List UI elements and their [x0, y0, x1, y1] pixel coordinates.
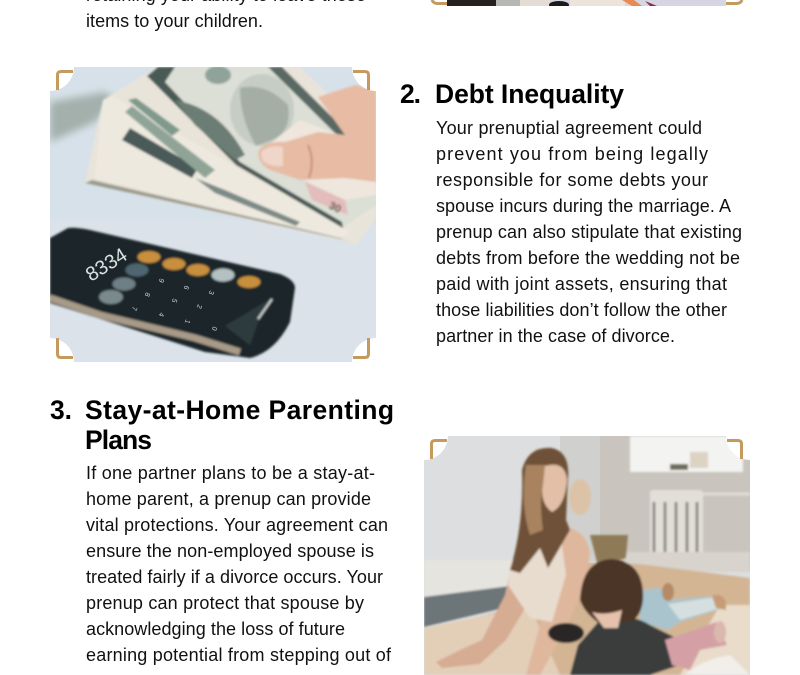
text block: section 2 body: Your prenuptial agreement could [436, 118, 702, 138]
section 2 heading: Debt Inequality [435, 79, 624, 109]
text block: section 2 body: prevent you from being legally [436, 144, 708, 164]
text block: section 3 body: acknowledging the loss of future [86, 619, 345, 639]
text block: section 2 body: prenup can also stipulate that existing [436, 222, 742, 242]
text block: section 3 body [86, 463, 392, 665]
calculator digits: 6 [182, 284, 190, 290]
calculator digits: 8334 [82, 244, 131, 286]
basket and plant [590, 535, 628, 566]
text block: section 3 body: home parent, a prenup can provide [86, 489, 371, 509]
text block: section 2 body: paid with joint assets, ensuring that [436, 274, 727, 294]
woman torso [507, 544, 567, 623]
text block: section 3 body: earning potential from stepping out of [86, 645, 392, 665]
text block: section 3 body: vital protections. Your agreement can [86, 515, 388, 535]
woman arms [436, 580, 524, 668]
calculator digits: 0 [210, 325, 218, 331]
photo: cash and calculator phone [50, 67, 376, 362]
baseboard and floor [424, 560, 514, 597]
calculator digits: 7 [130, 305, 138, 311]
fanned banknotes [85, 67, 376, 245]
text block: end of section 1: items to your children. [86, 11, 263, 31]
section 3 heading [50, 395, 394, 455]
text block: section 3 body: treated fairly if a divorce occurs. Your [86, 567, 383, 587]
calculator digits: 1 [183, 318, 191, 324]
section 3 heading: Stay-at-Home Parenting [85, 395, 394, 425]
photo: top image fragment [430, 0, 744, 6]
text block: section 3 body: prenup can protect that spouse by [86, 593, 364, 613]
radiator [650, 490, 704, 552]
hand and thumb [258, 85, 376, 182]
text block: section 2 body: debts from before the wedding not be [436, 248, 740, 268]
yoga mat [424, 585, 508, 628]
calculator digits: 5 [170, 297, 178, 303]
window [630, 436, 743, 472]
section 3 heading: Plans [85, 425, 152, 455]
top banknote [147, 67, 376, 228]
calculator keys [138, 251, 160, 263]
text block: section 2 body: those liabilities don’t follow the other [436, 300, 727, 320]
calculator digits: 9 [157, 277, 165, 283]
section 3 heading: 3. [50, 395, 72, 425]
phone body [50, 228, 295, 358]
text block: section 2 body: partner in the case of divorce. [436, 326, 675, 346]
calculator digits [82, 244, 218, 331]
child head [580, 559, 643, 628]
woman legs [640, 588, 726, 630]
calculator digits: 8 [143, 291, 151, 297]
calculator digits: 3 [207, 289, 215, 295]
background blurred bill [50, 92, 115, 142]
text block: section 2 body [436, 118, 742, 346]
child body [570, 617, 680, 675]
text block: section 2 body: spouse incurs during the marriage. A [436, 196, 731, 216]
photo: mother and child on floor [424, 436, 750, 675]
section 2 heading: 2. [400, 79, 421, 109]
text block: section 3 body: ensure the non-employed spouse is [86, 541, 374, 561]
woman hair and face [510, 448, 570, 573]
text block: end of section 1 [86, 0, 366, 31]
calculator digits: 4 [157, 311, 165, 317]
text block: section 3 body: If one partner plans to be a stay-at- [86, 463, 375, 483]
text block: section 2 body: responsible for some debts your [436, 170, 708, 190]
photo: cash and calculator phone: 30 [327, 200, 343, 216]
calculator digits: 2 [195, 303, 203, 309]
